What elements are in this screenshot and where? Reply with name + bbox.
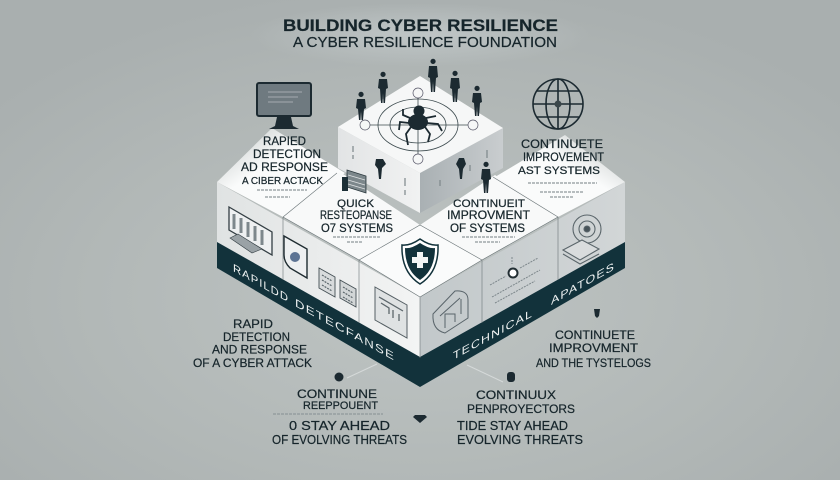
person 3: [428, 59, 438, 92]
text block: quick response: RESTEOPANSE: [320, 210, 392, 222]
side icon: gear and devices: [563, 215, 601, 264]
text block: lower left: AND RESPONSE: [212, 342, 307, 356]
connector: bottom right marker: [467, 365, 515, 382]
text block: upper right tile: [518, 137, 605, 197]
platform left foundation band: [217, 242, 420, 387]
side marks on cube: [353, 146, 487, 195]
text block: continuous improvement tile: [447, 198, 530, 242]
text block: lower left: DETECTION: [223, 330, 290, 344]
side icon: calendars: [319, 268, 356, 307]
marker: bottom centre: [413, 415, 427, 423]
icon: server stack: [342, 170, 366, 193]
text block: bottom left: 0 STAY AHEAD: [289, 418, 390, 433]
left band label continued: DETECFANSE: [295, 296, 395, 364]
text block: bottom left: [272, 387, 407, 447]
text block: lower right: IMPROVMENT: [549, 341, 639, 355]
text block: continuous improvement tile: IMPROVMENT: [447, 210, 530, 222]
title: BUILDING CYBER RESILIENCE: [283, 16, 558, 35]
left band label: RAPILDD: [233, 261, 289, 305]
icon: globe: [533, 79, 583, 129]
cube keyhole marks: [375, 158, 466, 179]
person 6: [481, 162, 491, 193]
icon: shield: [402, 239, 438, 284]
top tile: right: [495, 135, 625, 217]
text block: quick response: [320, 198, 393, 242]
text block: lower left: OF A CYBER ATTACK: [193, 356, 312, 370]
text block: upper right tile: IMPROVEMENT: [523, 150, 605, 164]
platform right foundation band: [420, 242, 625, 387]
text block: quick response: QUICK: [337, 198, 375, 210]
platform left side face: [217, 182, 420, 358]
top tile: quick response: [283, 172, 420, 260]
connector: bottom left marker: [334, 364, 377, 382]
side icon: window panel: [375, 287, 407, 338]
cube top face: [338, 76, 503, 173]
text block: upper left tile: RAPIED: [263, 136, 306, 148]
text block: bottom right: PENPROYECTORS: [467, 402, 575, 416]
text block: lower right: [536, 328, 651, 370]
right band label continued: APATOES: [551, 259, 615, 308]
text block: upper right tile: CONTINUETE: [521, 137, 603, 151]
marker: right: [594, 309, 600, 318]
text block: bottom left: CONTINUNE: [297, 387, 377, 401]
top tile: shield: [359, 225, 482, 297]
icon: monitor: [257, 83, 311, 129]
platform: isometric foundation: [217, 128, 625, 387]
text block: continuous improvement tile: OF SYSTEMS: [450, 223, 525, 235]
person 1: [356, 92, 366, 120]
person 2: [378, 72, 388, 103]
text block: upper left tile: A CIBER ACTACK: [242, 176, 323, 187]
text block: bottom left: REEPPOUENT: [303, 400, 378, 412]
text block: upper left tile: [241, 136, 328, 197]
side icon: target diagram: [490, 257, 540, 303]
people around the cube: [356, 59, 491, 193]
text block: bottom right: EVOLVING THREATS: [457, 432, 583, 447]
side icon: dashboard monitor: [229, 207, 272, 255]
text block: lower left: [193, 317, 312, 370]
text block: lower right: CONTINUETE: [555, 328, 635, 342]
side icon: badge: [284, 236, 307, 278]
top tile: improvement: [420, 175, 558, 260]
text block: bottom right: TIDE STAY AHEAD: [457, 418, 568, 433]
text block: upper left tile: DETECTION: [253, 147, 321, 161]
cube left face: [338, 127, 420, 213]
text block: continuous improvement tile: CONTINUEIT: [453, 198, 525, 210]
platform right side face: [420, 182, 625, 358]
text block: bottom right: [457, 388, 583, 447]
icon: spider: [399, 106, 442, 145]
person 4: [450, 71, 460, 102]
text block: lower left: RAPID: [233, 317, 273, 331]
side icon: circuit map: [433, 291, 468, 333]
cube right face: [420, 128, 503, 213]
tile edges: [283, 173, 558, 358]
top cube with threat: [338, 76, 503, 213]
subtitle: A CYBER RESILIENCE FOUNDATION: [293, 35, 557, 51]
text block: bottom left: OF EVOLVING THREATS: [272, 432, 407, 447]
text block: lower right: AND THE TYSTELOGS: [536, 356, 651, 370]
right band label: TECHNICAL: [453, 306, 533, 363]
person 5: [472, 86, 482, 116]
text block: bottom right: CONTINUUX: [476, 388, 556, 402]
text block: upper right tile: AST SYSTEMS: [518, 165, 600, 177]
text block: quick response: O7 SYSTEMS: [321, 223, 393, 235]
top tile: left: [217, 128, 345, 217]
text block: upper left tile: AD RESPONSE: [241, 160, 328, 174]
target rings: [360, 88, 478, 164]
